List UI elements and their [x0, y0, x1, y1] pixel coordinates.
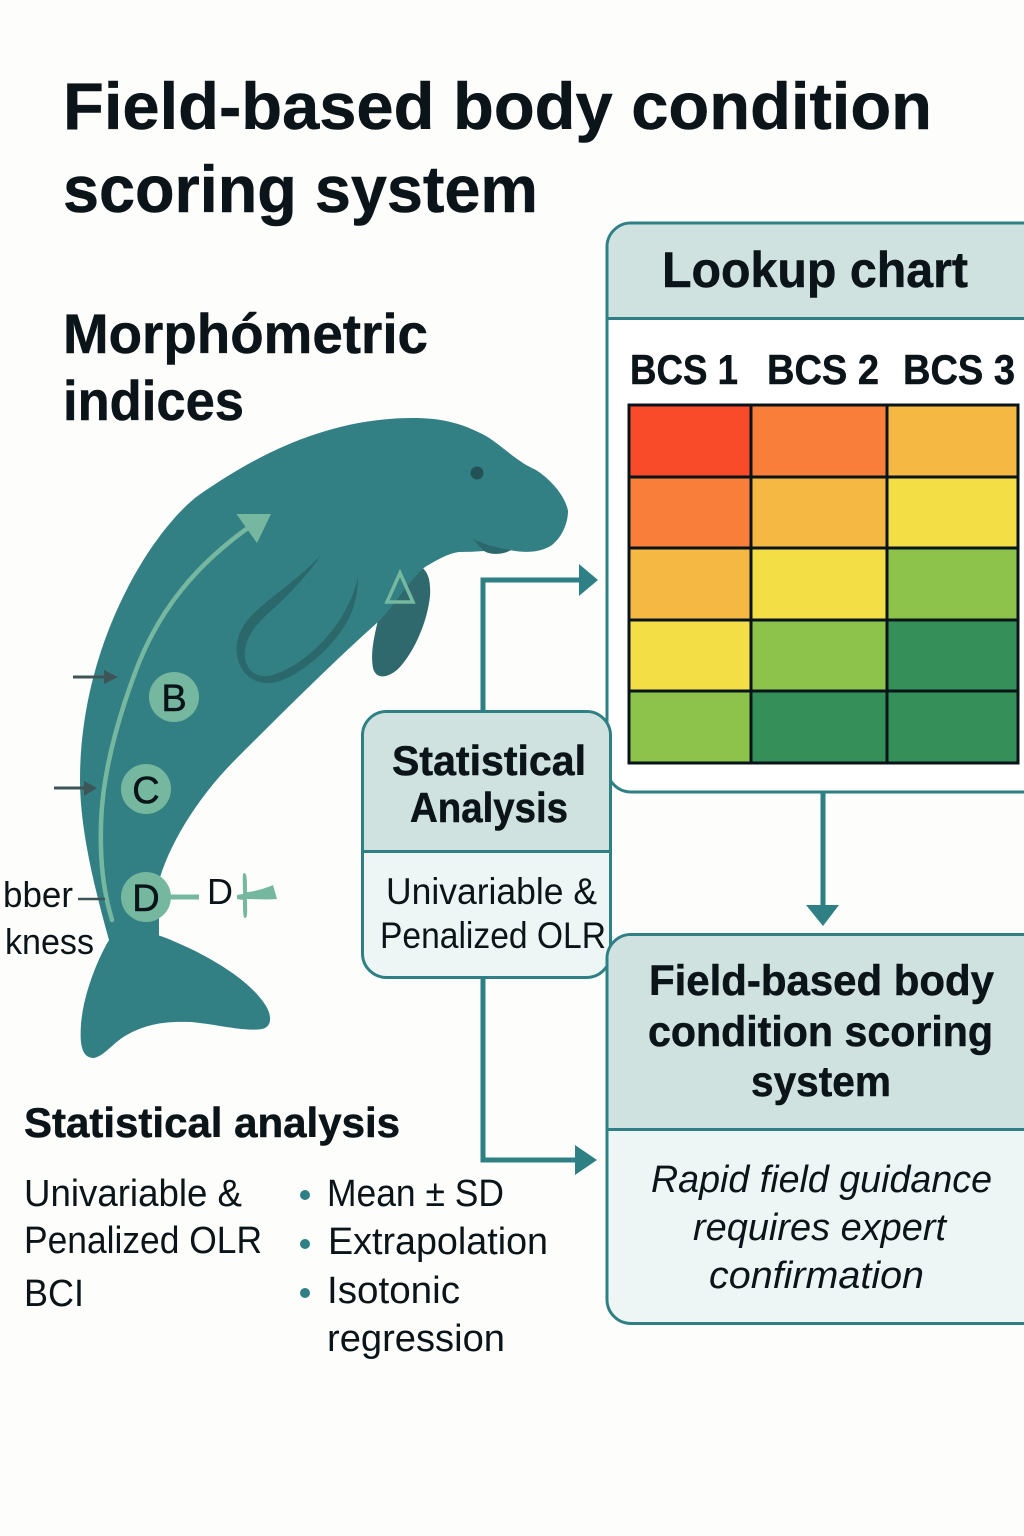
column labels: [630, 346, 1015, 393]
pointer arrow lower: [54, 781, 97, 796]
statistical analysis heading: [392, 737, 586, 831]
statistical analysis body: Penalized OLR: [380, 915, 606, 956]
marker C: [121, 764, 171, 814]
heading: morphometric indices: Morphómetric: [63, 302, 428, 365]
blubber thickness label: kness: [5, 921, 94, 962]
dugong eye: [470, 466, 484, 480]
blubber thickness label: [3, 874, 105, 962]
pointer arrow upper: [73, 670, 118, 684]
marker B: [149, 672, 199, 722]
field-based system note: [651, 1159, 992, 1297]
statistical analysis body: [380, 871, 606, 956]
marker D: [121, 872, 171, 922]
heading: morphometric indices: indices: [63, 369, 244, 432]
bullet list: Isotonic: [327, 1270, 460, 1312]
dugong mouth: [473, 539, 511, 554]
statistical analysis body: Univariable &: [386, 871, 597, 912]
marker C: C: [132, 770, 160, 812]
lookup chart header: [608, 224, 1024, 318]
panel: lookup chart: [607, 223, 1024, 792]
small fin icon: [237, 873, 277, 918]
dugong front flipper: [372, 565, 430, 676]
text block: methods: Univariable &: [24, 1173, 242, 1215]
inner flipper outline: [237, 555, 358, 683]
field-based system note: Rapid field guidance: [651, 1159, 992, 1201]
column labels: BCS 1: [630, 346, 738, 393]
field-based system header: [608, 936, 1024, 1128]
column labels: BCS 3: [903, 346, 1015, 393]
text block: methods: [24, 1173, 262, 1315]
dugong body: [80, 418, 568, 1058]
field-based system heading: [648, 957, 994, 1106]
lookup chart heading: Lookup chart: [662, 242, 968, 298]
bullet list: [300, 1173, 548, 1360]
field-based system note: confirmation: [709, 1255, 924, 1297]
title: [63, 69, 932, 226]
bullet list: Mean ± SD: [327, 1173, 504, 1215]
heading: statistical analysis: Statistical analysis: [24, 1099, 400, 1146]
label D: D: [207, 871, 233, 912]
statistical analysis header: [364, 713, 609, 850]
connector arrow: statistical analysis to field system: [483, 978, 597, 1175]
panel: statistical analysis: [362, 712, 611, 978]
marker D line: [160, 894, 199, 900]
field-based system heading: condition scoring: [648, 1008, 993, 1056]
connector arrow: lookup chart to field system: [806, 792, 839, 926]
text block: methods: Penalized OLR: [24, 1220, 262, 1262]
heat grid: [629, 405, 1018, 763]
marker D: D: [132, 878, 160, 920]
bullet list: regression: [327, 1318, 505, 1360]
bullet list: Extrapolation: [328, 1221, 548, 1263]
field-based system heading: Field-based body: [649, 957, 994, 1005]
connector arrow: statistical analysis to lookup chart: [483, 564, 598, 711]
text block: methods: BCI: [24, 1273, 84, 1315]
blubber thickness label: bber: [3, 874, 73, 915]
illustration: dugong with morphometric markers: [3, 418, 568, 1058]
field-based system heading: system: [751, 1058, 891, 1106]
panel: field-based system: [607, 934, 1024, 1324]
field-based system note: requires expert: [693, 1207, 947, 1249]
title: scoring system: [63, 152, 538, 226]
statistical analysis heading: Statistical: [392, 737, 586, 784]
title: Field-based body condition: [63, 69, 932, 143]
marker B: B: [161, 678, 187, 720]
statistical analysis heading: Analysis: [410, 784, 568, 831]
heading: morphometric indices: [63, 302, 428, 432]
triangle marker: [387, 573, 413, 602]
column labels: BCS 2: [767, 346, 879, 393]
spine curve arrow: [101, 514, 271, 920]
